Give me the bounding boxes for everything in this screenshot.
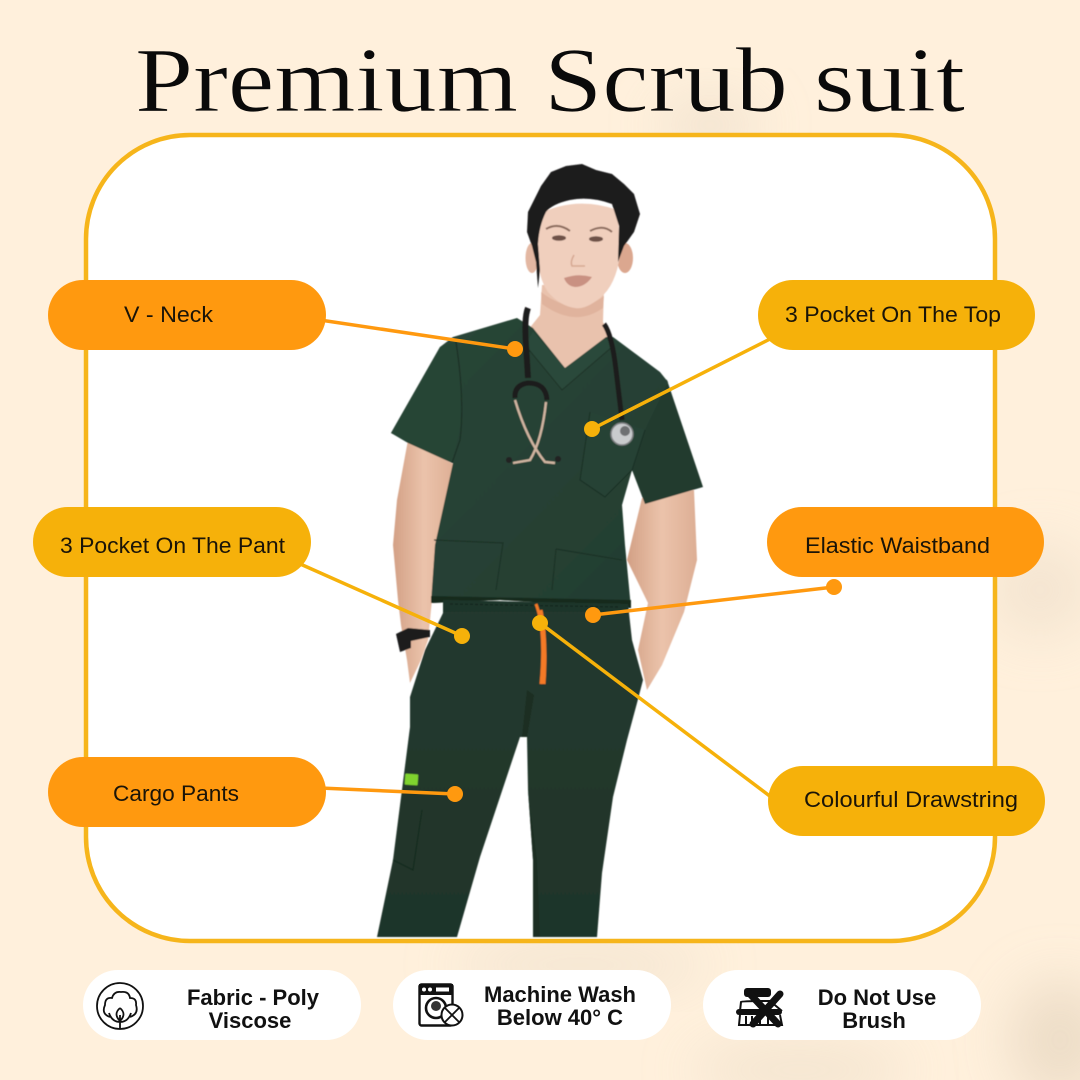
- care badge: machine wash: [393, 970, 671, 1040]
- neck: [528, 285, 612, 372]
- icon: brush crossed out: [736, 988, 782, 1025]
- callout line: Cargo Pants: [320, 788, 455, 794]
- callout line: Elastic Waistband: [593, 587, 834, 615]
- shirt hem: [431, 596, 631, 608]
- shirt V neck trim: [525, 332, 612, 390]
- figure: doctor in scrub suit: [377, 164, 703, 937]
- care badge: brush: [703, 970, 981, 1040]
- label: 3 Pocket On The Top: 3 Pocket On The Top: [785, 302, 1001, 327]
- hair: [527, 164, 640, 288]
- stethoscope: [506, 308, 633, 463]
- label: Cargo Pants: [48, 757, 326, 827]
- callout line: 3 Pocket On The Top: [592, 338, 772, 429]
- cargo tag: [405, 774, 418, 785]
- icon: cotton flower: [97, 983, 143, 1029]
- label: 3 Pocket On The Top: [758, 280, 1035, 350]
- title: Premium Scrub suit: [135, 29, 965, 131]
- care badge: machine wash: Machine Wash: [484, 982, 636, 1007]
- label: 3 Pocket On The Pant: [33, 507, 311, 577]
- label: V - Neck: [48, 280, 326, 350]
- label: Colourful Drawstring: Colourful Drawstring: [804, 787, 1018, 812]
- pants: [377, 600, 643, 937]
- callout line: Colourful Drawstring: [540, 623, 775, 800]
- callout line: V-Neck: [320, 320, 515, 349]
- face: [537, 204, 620, 308]
- waistband: [443, 600, 628, 612]
- icon: washing machine crossed: [419, 984, 462, 1026]
- eyes and brows: [546, 226, 612, 232]
- label: 3 Pocket On The Pant: 3 Pocket On The Pant: [60, 533, 285, 558]
- shirt sleeve back shade: [632, 370, 703, 504]
- care badge: brush: Brush: [842, 1008, 906, 1033]
- pants shading: [522, 690, 534, 737]
- label: Colourful Drawstring: [768, 766, 1045, 836]
- label: Elastic Waistband: [767, 507, 1044, 577]
- left arm: [393, 440, 455, 683]
- right arm: [627, 490, 697, 690]
- care badge: machine wash: Below 40° C: [497, 1005, 623, 1030]
- care badge: fabric: Fabric - Poly: [187, 985, 320, 1010]
- care badge: brush: Do Not Use: [818, 985, 936, 1010]
- label: Elastic Waistband: Elastic Waistband: [805, 533, 990, 558]
- label: Cargo Pants: Cargo Pants: [113, 781, 239, 806]
- marker dots: [447, 341, 842, 802]
- watch: [396, 628, 430, 652]
- shirt chest pocket: [580, 412, 645, 497]
- ears: [526, 243, 538, 273]
- shirt lower pockets: [434, 540, 622, 590]
- care badge: fabric: Viscose: [209, 1008, 291, 1033]
- care badge: fabric: [83, 970, 361, 1040]
- panel: product photo frame: [86, 135, 995, 941]
- shirt body: [391, 318, 668, 608]
- mouth: [564, 275, 592, 287]
- shirt left sleeve: [391, 342, 462, 463]
- label: V - Neck: V - Neck: [124, 302, 214, 327]
- colourful drawstring: [536, 604, 545, 684]
- callout line: 3 Pocket On The Pant: [298, 563, 462, 636]
